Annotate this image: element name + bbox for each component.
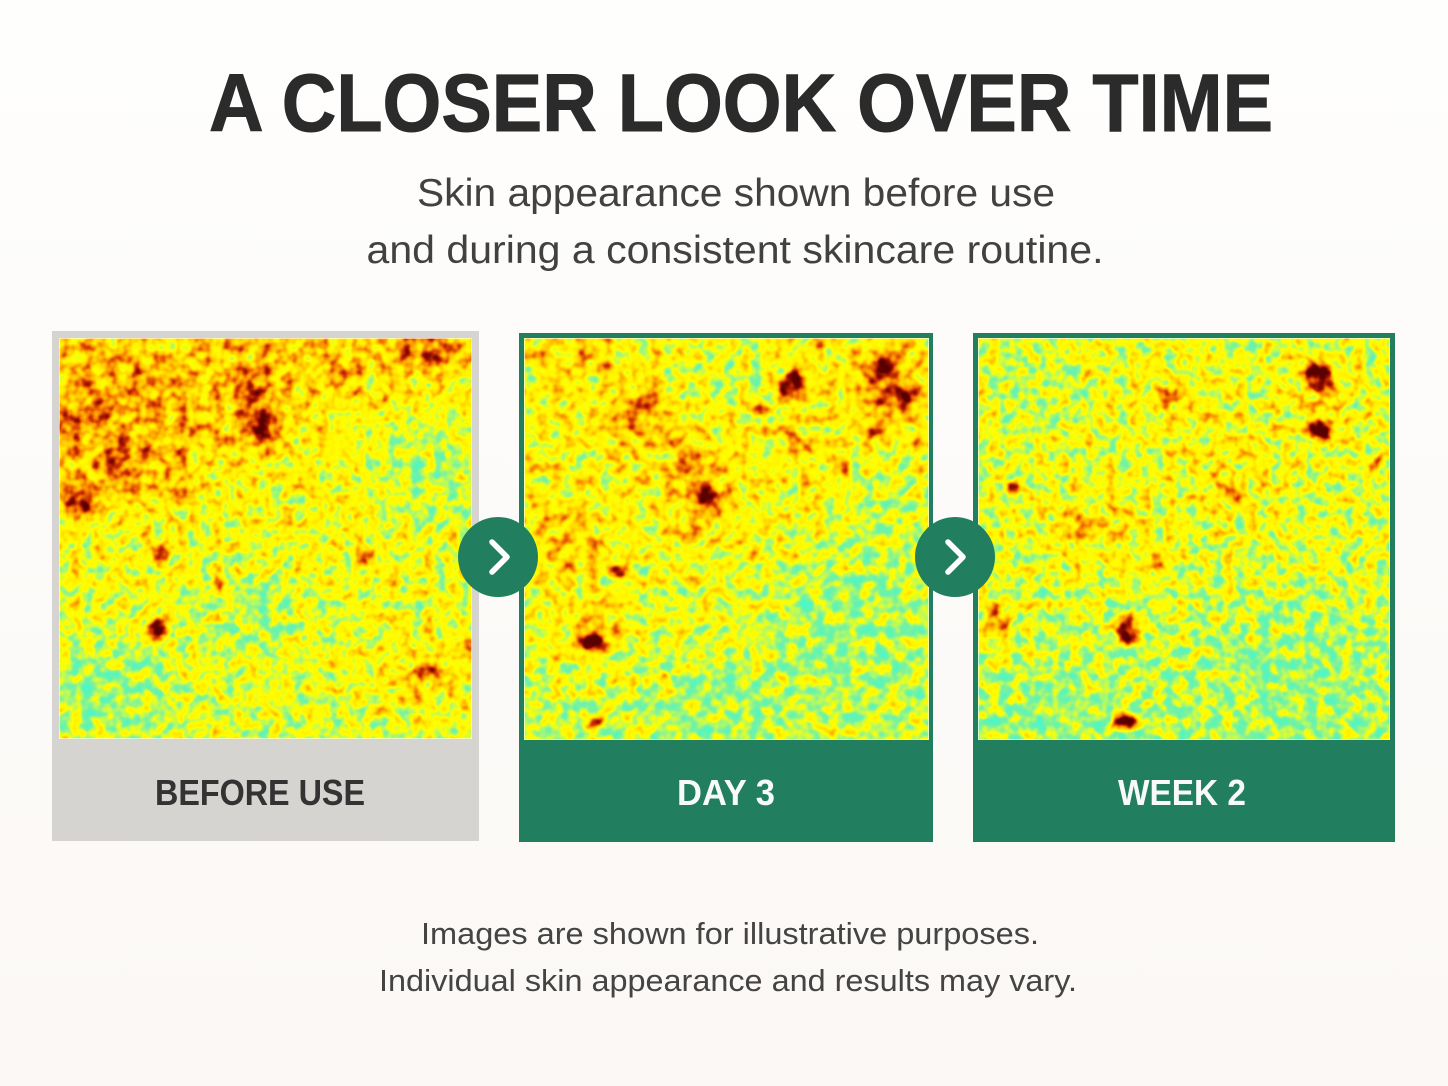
subtitle: Skin appearance shown before use xyxy=(417,172,1055,215)
subtitle: and during a consistent skincare routine. xyxy=(366,229,1104,272)
title: A CLOSER LOOK OVER TIME xyxy=(209,58,1273,149)
label: before use: BEFORE USE xyxy=(155,772,365,813)
footnote: Individual skin appearance and results may vary. xyxy=(379,963,1077,998)
arrow: day 3 to week 2 xyxy=(915,517,995,597)
heatmap: day 3 xyxy=(520,335,930,740)
arrow: before use to day 3 xyxy=(458,517,538,597)
subtitle xyxy=(366,172,1104,272)
panel: before use xyxy=(40,328,485,841)
footnote: Images are shown for illustrative purposes. xyxy=(421,916,1039,951)
heatmap: week 2 xyxy=(975,338,1390,740)
panel: week 2 xyxy=(973,333,1395,842)
label: week 2: WEEK 2 xyxy=(1118,772,1246,813)
heatmap: before use xyxy=(40,328,485,740)
footnote xyxy=(379,916,1077,998)
panel: day 3 xyxy=(519,333,933,842)
label: day 3: DAY 3 xyxy=(677,772,775,813)
